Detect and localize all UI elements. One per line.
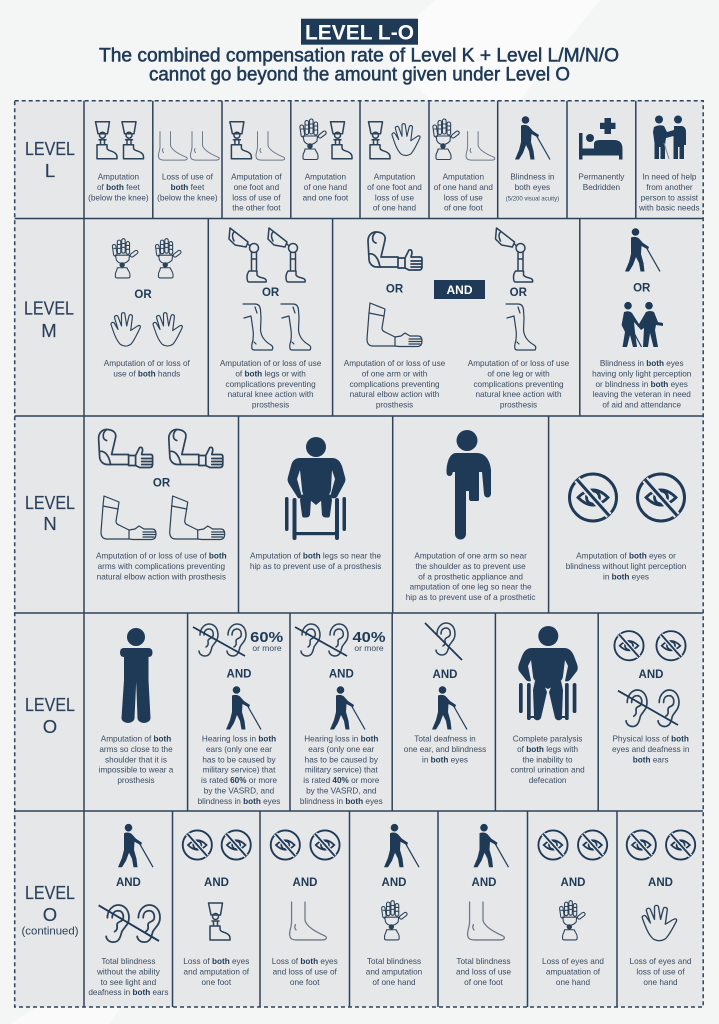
cell: hearing loss 40%: by the VASRD, and <box>306 786 377 796</box>
cell: blindness with aid: or blindness in both eyes <box>596 380 688 389</box>
AND badge <box>434 280 485 299</box>
cell: hearing loss 60%: blindness in both eyes <box>198 797 280 806</box>
cell: total deafness in one ear: Total deafness in <box>414 734 476 744</box>
cell: needs help from another person <box>638 116 700 213</box>
cell: one arm and one leg: Amputation of or loss of use <box>344 359 446 368</box>
row heading: Level L: LEVEL <box>25 138 75 159</box>
row heading: Level O continued: LEVEL <box>25 882 75 903</box>
cell: total deafness in one ear: AND <box>433 669 457 681</box>
cell: one arm and one leg: the shoulder as to prevent use <box>416 562 526 571</box>
row heading: Level M <box>24 298 74 341</box>
cell: blindness with aid: Blindness in both eyes <box>600 359 684 368</box>
cell: both eyes and one foot <box>183 830 251 987</box>
subtitle <box>99 45 619 86</box>
cell: blindness and loss of one foot <box>456 824 511 987</box>
cell: hearing loss 60%: AND <box>227 668 251 680</box>
cell: both legs: of both legs or with <box>235 369 306 378</box>
cell: permanently bedridden: Bedridden <box>583 183 621 192</box>
cell: blindness with aid: of aid and attendance <box>602 401 682 410</box>
cell: both arms near shoulder: impossible to wear a <box>99 766 174 775</box>
cell: total blindness and deafness: without the ability <box>96 967 161 976</box>
cell: one arm and one leg: prosthesis <box>376 401 413 410</box>
icons: prosthetic leg or leg: OR <box>510 287 528 299</box>
cell: both legs: OR <box>262 287 280 299</box>
cell: loss of eyes and loss of one hand: Loss of eyes and <box>630 957 692 966</box>
cell: both legs near hip: hip as to prevent use of a prosthesis <box>250 562 381 571</box>
cell: loss of use of both feet: both feet <box>171 183 204 192</box>
cell: hearing loss 60%: by the VASRD, and <box>204 786 275 796</box>
cell: one arm and one leg: natural knee action with <box>475 390 562 399</box>
cell: one arm and one leg <box>406 430 535 602</box>
cell: permanently bedridden: Permanently <box>578 172 625 182</box>
cell: one hand and loss of one foot <box>433 119 495 213</box>
cell: one arm and one leg: Amputation of one arm so near <box>414 552 527 560</box>
cell: blindness with aid: OR <box>633 282 651 294</box>
cell: loss of eyes and loss of one hand: one hand <box>643 978 678 987</box>
cell: blindness in both eyes <box>506 116 559 202</box>
cell: total deafness in one ear <box>404 623 486 764</box>
cell: amputation of both feet: of both feet <box>97 183 140 192</box>
cell: blindness in both eyes: both eyes <box>515 183 550 192</box>
icons: prosthetic arm or arm <box>367 232 422 346</box>
cell: blindness and one hand: and amputation <box>366 967 423 976</box>
cell: both arms near shoulder: Amputation of both <box>101 734 171 744</box>
icons: prosthetic arm or arm: OR <box>386 283 404 295</box>
cell: loss of eyes and one hand <box>538 830 607 987</box>
cell: total blindness and deafness: deafness in both ears <box>88 988 168 997</box>
cell: both eyes <box>566 474 687 581</box>
title badge: LEVEL L-O <box>305 22 414 45</box>
cell: blindness and one hand: Total blindness <box>367 957 421 966</box>
cell: needs help from another person: with basic needs <box>638 204 700 213</box>
cell: one arm and one leg: complications preventing <box>349 380 440 389</box>
cell: both eyes and one foot: AND <box>204 877 229 889</box>
cell: both hands: Amputation of or loss of <box>104 359 191 368</box>
cell: loss of eyes and one hand: AND <box>561 877 585 889</box>
cell: loss of eyes and loss of one hand <box>627 830 695 987</box>
cell: one foot and loss of other foot: the other foot <box>232 204 281 213</box>
cell: one arm and one leg: Amputation of or loss of use <box>468 359 570 368</box>
cell: needs help from another person: In need of help <box>642 172 697 182</box>
cell: physical loss of eyes and deafness <box>612 631 690 764</box>
cell: both eyes and loss of one foot <box>271 830 340 987</box>
row: Level L <box>25 116 700 213</box>
cell: one arm and one leg <box>344 228 570 410</box>
row heading: Level N: LEVEL <box>25 492 75 513</box>
row heading: Level M: M <box>41 320 57 341</box>
cell: one arm and one leg: of one arm or with <box>362 369 428 378</box>
cell: needs help from another person: from another <box>646 183 693 192</box>
cell: total blindness and deafness: AND <box>116 877 141 889</box>
cell: one hand and one foot: Amputation <box>305 172 347 182</box>
row heading: Level O continued: O <box>43 904 57 925</box>
cell: paralysis of both legs: Complete paralysis <box>513 734 582 744</box>
row heading: Level O continued <box>22 882 78 938</box>
cell: hearing loss 60%: ears (only one ear <box>206 745 272 754</box>
cell: both arms: natural elbow action with prosthesis <box>97 572 226 581</box>
cell: paralysis of both legs <box>510 626 585 785</box>
cell: total deafness in one ear: one ear, and blindness <box>404 745 486 754</box>
cell: both hands <box>104 239 191 378</box>
cell: one foot and loss of one hand: loss of use <box>375 193 415 202</box>
cell: amputation of both feet: Amputation <box>98 172 140 182</box>
cell: one foot and loss of one hand <box>367 122 422 213</box>
cell: total blindness and deafness <box>88 824 168 997</box>
cell: one arm and one leg: amputation of one leg so near the <box>410 583 532 592</box>
cell: one arm and one leg: complications preventing <box>473 380 564 389</box>
cell: hearing loss 40%: blindness in both eyes <box>300 797 383 806</box>
cell: both arms near shoulder: prosthesis <box>117 776 155 785</box>
cell: one hand and one foot: of one hand <box>304 183 347 192</box>
cell: both legs: natural knee action with <box>228 390 314 399</box>
cell: total deafness in one ear: in both eyes <box>422 755 468 764</box>
row heading: Level L <box>25 138 75 181</box>
cell: one arm and one leg: of one leg or with <box>487 369 550 378</box>
cell: hearing loss 40%: Hearing loss in both <box>304 734 378 744</box>
cell: paralysis of both legs: control urination and <box>510 766 585 775</box>
cell: one arm and one leg: natural elbow action with <box>350 390 440 399</box>
cell: both arms near shoulder <box>99 628 174 785</box>
row heading: Level M: LEVEL <box>24 298 74 318</box>
icons: prosthetic leg or leg <box>496 228 536 350</box>
cell: hearing loss 60%: or more <box>252 643 282 653</box>
cell: one foot and loss of one hand: of one hand <box>373 204 417 213</box>
cell: both eyes and loss of one foot: Loss of both eyes <box>272 957 338 966</box>
cell: one arm and one leg: hip as to prevent use of a prosthetic <box>406 593 535 602</box>
row heading: Level N <box>25 492 75 534</box>
cell: blindness and one hand <box>366 824 423 987</box>
cell: hearing loss 60%: 60% <box>250 629 283 646</box>
cell: both legs: Amputation of or loss of use <box>220 359 322 368</box>
cell: both legs near hip: Amputation of both legs so near the <box>250 552 381 560</box>
cell: one hand and loss of one foot: of one hand and <box>434 183 493 192</box>
cell: hearing loss 40%: military service) that <box>305 766 378 775</box>
row: Level N <box>25 430 687 602</box>
cell: physical loss of eyes and deafness: eyes and deafness in <box>612 745 690 754</box>
cell: hearing loss 60% <box>193 624 283 806</box>
cell: one foot and loss of other foot: Amputation of <box>231 172 282 182</box>
cell: blindness and loss of one foot: and loss of use <box>456 967 511 976</box>
cell: both eyes and one foot: one foot <box>202 978 232 987</box>
cell: blindness with aid <box>592 228 692 410</box>
cell: both arms <box>96 430 227 581</box>
cell: one hand and one foot: and one foot <box>303 193 349 202</box>
row: Level O continued <box>22 824 695 997</box>
cell: blindness in both eyes: (5/200 visual acuity) <box>506 196 559 202</box>
cell: hearing loss 40%: AND <box>329 668 354 680</box>
subtitle: The combined compensation rate of Level K + Level L/M/N/O <box>99 45 619 67</box>
cell: one arm and one leg: of a prosthetic appliance and <box>418 572 523 581</box>
cell: one hand and loss of one foot: loss of use <box>444 193 483 202</box>
cell: paralysis of both legs: the inability to <box>523 755 573 764</box>
cell: hearing loss 40%: or more <box>354 643 384 653</box>
cell: hearing loss 40%: has to be caused by <box>305 755 379 764</box>
cell: total blindness and deafness: Total blindness <box>101 957 155 966</box>
cell: blindness with aid: having only light perception <box>592 369 692 378</box>
cell: both legs <box>220 228 322 410</box>
cell: one foot and loss of other foot <box>230 122 285 213</box>
cell: both eyes and loss of one foot: one foot <box>290 978 320 987</box>
row heading: Level N: N <box>43 513 57 534</box>
cell: loss of eyes and one hand: ampuatation of <box>546 967 601 976</box>
cell: loss of use of both feet: Loss of use of <box>162 172 214 182</box>
cell: both eyes: Amputation of both eyes or <box>576 552 676 560</box>
cell: one hand and loss of one foot: Amputation <box>443 172 484 182</box>
cell: paralysis of both legs: defecation <box>529 776 567 785</box>
cell: hearing loss 60%: is rated 60% or more <box>201 776 277 785</box>
cell: one foot and loss of other foot: loss of use of <box>232 193 281 202</box>
cell: one foot and loss of one hand: Amputation <box>374 172 416 182</box>
cell: blindness and one hand: AND <box>382 877 406 889</box>
cell: hearing loss 60%: has to be caused by <box>202 755 277 764</box>
cell: hearing loss 60%: military service) that <box>203 766 276 775</box>
cell: hearing loss 40%: 40% <box>352 629 386 646</box>
cell: one hand and loss of one foot: of one foot <box>444 204 483 213</box>
cell: amputation of both feet <box>88 122 149 202</box>
cell: paralysis of both legs: of both legs with <box>517 745 578 754</box>
cell: both hands: use of both hands <box>113 369 180 378</box>
cell: loss of eyes and one hand: Loss of eyes and <box>542 957 604 966</box>
cell: physical loss of eyes and deafness: Physical loss of both <box>612 734 689 744</box>
cell: both legs near hip <box>250 437 382 571</box>
cell: one foot and loss of one hand: of one foot and <box>367 183 422 192</box>
row heading: Level O: LEVEL <box>25 694 75 715</box>
cell: both eyes and loss of one foot: and loss of use of <box>273 967 338 976</box>
cell: loss of eyes and one hand: one hand <box>556 978 591 987</box>
cell: blindness and loss of one foot: of one foot <box>464 978 504 987</box>
cell: hearing loss 40%: is rated 40% or more <box>303 776 379 785</box>
cell: physical loss of eyes and deafness: both ears <box>633 755 669 764</box>
cell: both eyes: in both eyes <box>603 572 649 581</box>
cell: both eyes and one foot: and amputation of <box>184 967 250 976</box>
cell: blindness in both eyes: Blindness in <box>510 172 555 182</box>
AND badge: AND <box>446 283 473 297</box>
row heading: Level L: L <box>45 160 55 181</box>
cell: blindness and one hand: of one hand <box>372 978 416 987</box>
cell: hearing loss 40% <box>295 624 386 806</box>
cell: blindness and loss of one foot: AND <box>472 877 496 889</box>
cell: loss of eyes and loss of one hand: AND <box>648 877 673 889</box>
cell: permanently bedridden <box>578 118 625 192</box>
cell: blindness and loss of one foot: Total blindness <box>456 957 511 966</box>
cell: both legs: complications preventing <box>226 380 316 389</box>
row heading: Level O <box>25 694 75 737</box>
cell: both eyes and loss of one foot: AND <box>293 877 317 889</box>
cell: loss of use of both feet <box>157 132 219 202</box>
row: Level O <box>25 623 690 806</box>
cell: hearing loss 60%: Hearing loss in both <box>202 734 276 744</box>
cell: both arms near shoulder: shoulder that it is <box>105 755 167 764</box>
cell: both arms near shoulder: arms so close to the <box>99 745 173 754</box>
cell: both legs: prosthesis <box>252 401 289 410</box>
row heading: Level O continued: (continued) <box>22 926 78 938</box>
cell: physical loss of eyes and deafness: AND <box>639 669 663 681</box>
cell: both hands: OR <box>134 289 152 301</box>
cell: blindness with aid: leaving the veteran in need <box>593 390 691 399</box>
cell: one hand and one foot <box>300 119 352 202</box>
cell: loss of use of both feet: (below the knee) <box>157 193 218 202</box>
cell: amputation of both feet: (below the knee) <box>88 193 149 202</box>
cell: total blindness and deafness: to see light and <box>101 978 157 987</box>
cell: both arms: arms with complications preventing <box>98 562 225 571</box>
cell: both eyes: blindness without light perception <box>566 562 687 571</box>
cell: loss of eyes and loss of one hand: loss of use of <box>636 967 685 976</box>
cell: one arm and one leg: prosthesis <box>500 401 537 410</box>
cell: hearing loss 40%: ears (only one ear <box>308 745 375 754</box>
cell: both arms: Amputation of or loss of use of both <box>96 552 227 560</box>
cell: both eyes and one foot: Loss of both eyes <box>183 957 249 966</box>
cell: both arms: OR <box>153 477 171 489</box>
cell: one foot and loss of other foot: one foot and <box>234 183 280 192</box>
row: Level M <box>24 228 692 410</box>
row heading: Level O: O <box>43 716 57 737</box>
subtitle: cannot go beyond the amount given under Level O <box>149 64 570 86</box>
cell: needs help from another person: person to assist <box>641 193 699 202</box>
